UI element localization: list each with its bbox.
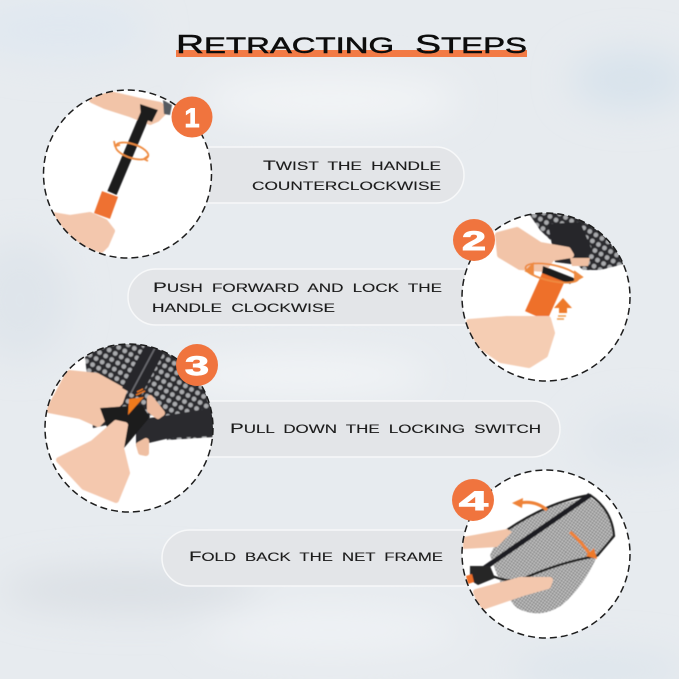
step 1 text: T WIST THE HANDLE — [263, 157, 441, 173]
panel: step 1 text pill — [200, 147, 464, 203]
panel: step 3 photo circle — [45, 342, 216, 512]
step 4 text: F OLD BACK THE NET FRAME — [189, 548, 443, 564]
curved arrows — [520, 502, 591, 556]
lower hand — [59, 423, 127, 500]
net and clip — [528, 212, 632, 270]
net frame — [497, 495, 614, 556]
orange grip — [102, 194, 110, 216]
badge: number 3 — [176, 344, 218, 386]
bottom hand — [46, 214, 112, 250]
title text: R ETRACTING S TEPS — [176, 29, 527, 59]
step 2 text: P USH FORWARD AND LOCK THE — [153, 279, 442, 295]
step 1 text: COUNTERCLOCKWISE — [252, 181, 441, 193]
badge: number 2 — [453, 219, 495, 261]
net bag — [490, 497, 614, 613]
strap — [136, 408, 214, 446]
badge: number 2: 2 — [462, 226, 486, 256]
telescopic pole — [112, 110, 147, 193]
panel: step 1 photo circle — [44, 90, 212, 258]
badge: number 1: 1 — [184, 103, 200, 133]
upper hand — [49, 373, 124, 424]
locking clip — [100, 405, 150, 448]
step 2 text: HANDLE CLOCKWISE — [152, 303, 335, 315]
step 3 text: P ULL DOWN THE LOCKING SWITCH — [230, 420, 541, 436]
panel: step 4 text pill — [162, 530, 480, 586]
upper arm — [463, 529, 512, 549]
top hand — [498, 230, 571, 269]
badge: number 4 — [452, 479, 494, 521]
badge: number 3: 3 — [185, 351, 209, 381]
net — [85, 343, 216, 440]
rotate arrow — [524, 262, 584, 284]
title underline — [176, 50, 527, 57]
badge: number 4: 4 — [459, 486, 488, 516]
orange handle — [536, 276, 554, 316]
panel: step 4 photo circle — [462, 470, 630, 638]
panel: step 2 photo circle — [462, 212, 632, 381]
panel: step 3 text pill — [200, 401, 560, 457]
lower arm — [476, 580, 550, 607]
lower hand — [469, 319, 552, 365]
top hand — [92, 94, 165, 122]
badge: number 1 — [172, 96, 212, 138]
orange arrow — [128, 397, 144, 415]
rotate arrow — [114, 139, 150, 163]
up arrow — [554, 298, 572, 313]
panel: step 2 text pill — [128, 269, 480, 325]
title: Retracting Steps — [176, 29, 527, 59]
step 1 text — [252, 157, 441, 193]
step 2 text — [152, 279, 442, 315]
black pole — [122, 342, 164, 398]
handle — [482, 492, 592, 568]
